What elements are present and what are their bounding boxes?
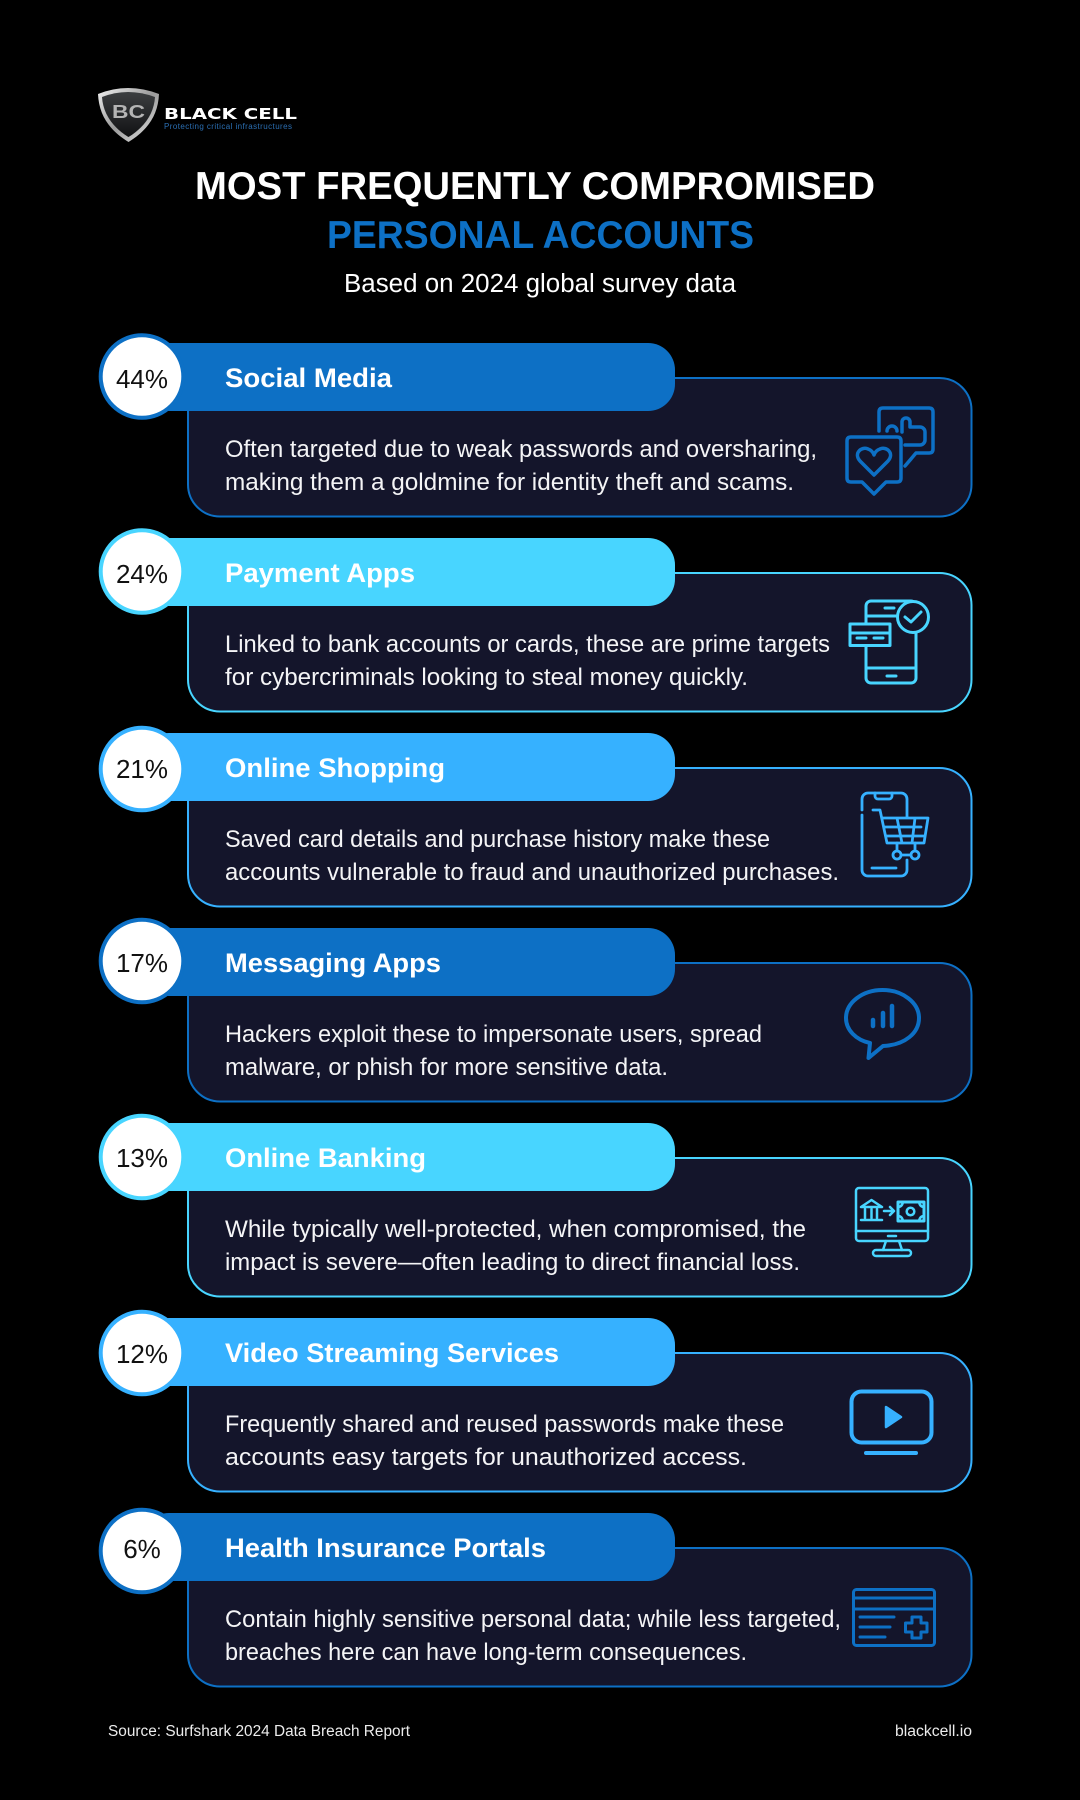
panel: Health Insurance Portals: Health Insurance Portals: [225, 1533, 546, 1563]
panel: Online Shopping: Saved card details and purchase history make these: [225, 826, 770, 853]
panel: Health Insurance Portals: Contain highly sensitive personal data; while less targeted,: [225, 1606, 841, 1633]
icon: video play screen: [852, 1392, 932, 1453]
panel: Messaging Apps: Hackers exploit these to impersonate users, spread: [225, 1021, 762, 1048]
icon: social chat bubbles: [847, 408, 933, 494]
panel: Online Shopping: Online Shopping: [225, 753, 445, 783]
panel: Health Insurance Portals: [101, 1510, 971, 1686]
icon: phone with card and check: [850, 601, 928, 683]
panel: Social Media: 44%: [116, 364, 168, 394]
panel: Payment Apps: Payment Apps: [225, 558, 415, 588]
panel: Online Banking: [101, 1116, 971, 1296]
icon: speech bubble with bars: [846, 990, 919, 1058]
panel: Messaging Apps: malware, or phish for more sensitive data.: [225, 1054, 668, 1081]
panel: Online Banking: While typically well-protected, when compromised, the: [225, 1216, 806, 1243]
logo: Black Cell: [98, 88, 297, 142]
panel: Video Streaming Services: [101, 1312, 971, 1492]
icon: monitor with bank and money: [856, 1188, 928, 1256]
panel: Health Insurance Portals: 6%: [123, 1534, 161, 1564]
panel: Payment Apps: 24%: [116, 559, 168, 589]
panel: Online Banking: Online Banking: [225, 1143, 426, 1173]
panel: Video Streaming Services: Video Streaming Services: [225, 1338, 559, 1368]
panel: Online Banking: impact is severe—often leading to direct financial loss.: [225, 1249, 800, 1276]
panel: Messaging Apps: 17%: [116, 948, 168, 978]
panel: Health Insurance Portals: breaches here can have long-term consequences.: [225, 1639, 747, 1666]
title: MOST FREQUENTLY COMPROMISED: [195, 165, 875, 208]
panel: Online Banking: 13%: [116, 1143, 168, 1173]
title: PERSONAL ACCOUNTS: [327, 214, 754, 257]
panel: Social Media: Often targeted due to weak passwords and oversharing,: [225, 436, 817, 463]
panel: Payment Apps: [101, 530, 971, 712]
panel: Online Shopping: [101, 728, 971, 906]
panel: Video Streaming Services: accounts easy targets for unauthorized access.: [225, 1444, 747, 1471]
panel: Messaging Apps: Messaging Apps: [225, 948, 441, 978]
title: [195, 165, 875, 257]
source note: Source: Surfshark 2024 Data Breach Report: [108, 1723, 411, 1740]
logo: Black Cell: BC: [112, 102, 145, 122]
panel: Video Streaming Services: Frequently shared and reused passwords make these: [225, 1411, 784, 1438]
panel: Video Streaming Services: 12%: [116, 1339, 168, 1369]
logo: Black Cell: Protecting critical infrastructures: [164, 122, 292, 131]
panel: Social Media: Social Media: [225, 363, 393, 393]
panel: Payment Apps: for cybercriminals looking to steal money quickly.: [225, 664, 748, 691]
panel: Online Shopping: 21%: [116, 754, 168, 784]
panel: Social Media: [101, 335, 971, 516]
panel: Online Shopping: accounts vulnerable to fraud and unauthorized purchases.: [225, 859, 839, 886]
logo: Black Cell: BLACK CELL: [164, 105, 297, 123]
panel: Messaging Apps: [101, 920, 971, 1102]
website: blackcell.io: [895, 1723, 972, 1740]
panel: Payment Apps: Linked to bank accounts or cards, these are prime targets: [225, 631, 830, 658]
icon: phone with shopping cart: [862, 793, 928, 876]
icon: insurance card with cross: [854, 1590, 934, 1646]
subtitle: Based on 2024 global survey data: [344, 270, 737, 298]
panel: Social Media: making them a goldmine for identity theft and scams.: [225, 469, 794, 496]
